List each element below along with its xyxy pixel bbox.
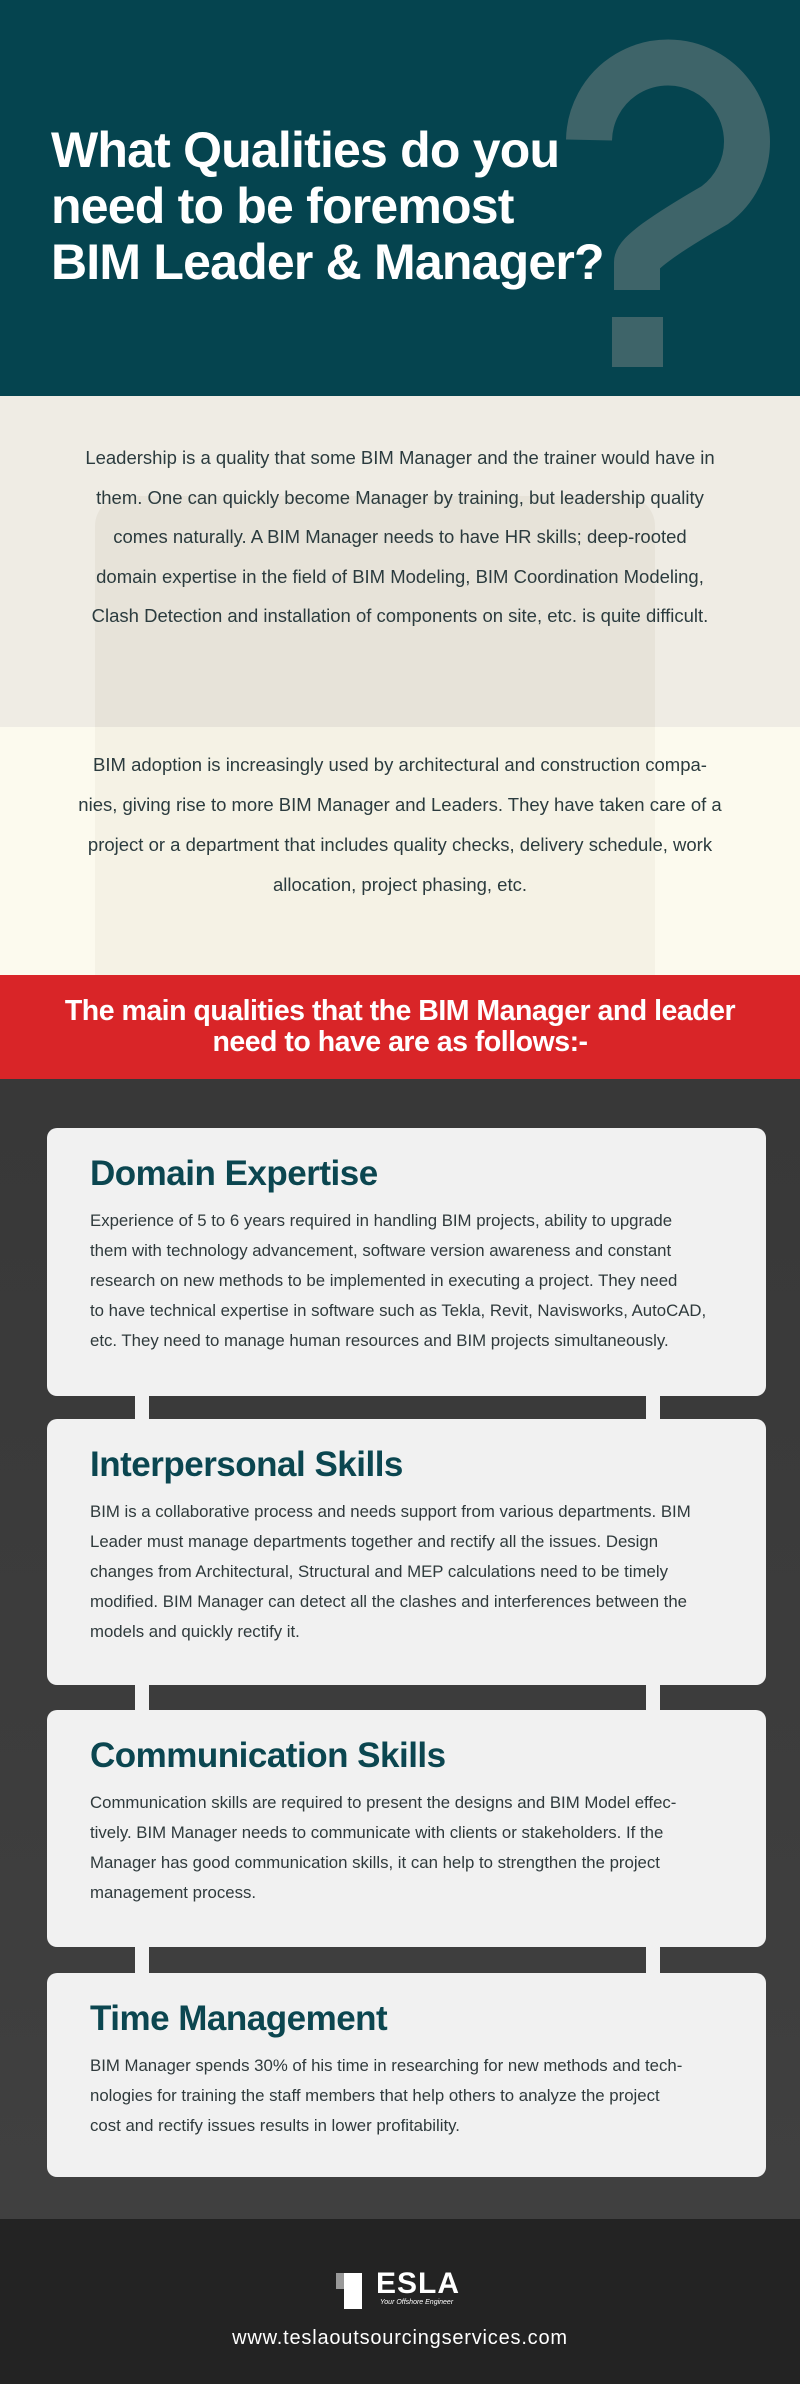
card: Interpersonal Skills: BIM is a collaborative process and needs support from various departments. BIM [90, 1502, 691, 1521]
card: Interpersonal Skills: models and quickly rectify it. [90, 1622, 300, 1641]
title: What Qualities do you [51, 122, 559, 178]
text block: BIM adoption: project or a department that includes quality checks, delivery schedule, work [88, 834, 712, 855]
banner heading [65, 995, 736, 1058]
text block: BIM adoption: nies, giving rise to more BIM Manager and Leaders. They have taken care of a [78, 794, 722, 815]
text block: leadership: comes naturally. A BIM Manager needs to have HR skills; deep-rooted [113, 526, 687, 547]
text block: leadership: Leadership is a quality that some BIM Manager and the trainer would have in [85, 447, 715, 468]
title: BIM Leader & Manager? [51, 234, 604, 290]
card: Domain Expertise: Domain Expertise [90, 1154, 378, 1193]
card: Time Management: Time Management [90, 1999, 387, 2038]
text block: leadership: Clash Detection and installation of components on site, etc. is quite difficult. [92, 605, 708, 626]
card: Domain Expertise: them with technology advancement, software version awareness and constant [90, 1241, 671, 1260]
card: Time Management [47, 1973, 766, 2177]
card: Communication Skills: management process. [90, 1883, 256, 1902]
dark section background [0, 1079, 800, 2219]
card: Domain Expertise: research on new methods to be implemented in executing a project. They need [90, 1271, 677, 1290]
card: Domain Expertise: etc. They need to manage human resources and BIM projects simultaneously. [90, 1331, 669, 1350]
banner heading: The main qualities that the BIM Manager and leader [65, 995, 735, 1027]
logo [336, 2267, 460, 2309]
red banner [0, 975, 800, 1079]
card: Time Management: BIM Manager spends 30% of his time in researching for new methods and tech- [90, 2056, 682, 2075]
card: Interpersonal Skills: changes from Architectural, Structural and MEP calculations need to be timely [90, 1562, 668, 1581]
card: Communication Skills: Manager has good communication skills, it can help to strengthen the project [90, 1853, 660, 1872]
card: Domain Expertise: Experience of 5 to 6 years required in handling BIM projects, ability to upgrade [90, 1211, 672, 1230]
title: need to be foremost [51, 178, 514, 234]
connectors [135, 1390, 149, 1980]
footer [0, 2219, 800, 2384]
text block: BIM adoption [78, 754, 722, 895]
banner heading: need to have are as follows:- [212, 1026, 588, 1058]
text block: BIM adoption: allocation, project phasing, etc. [273, 874, 527, 895]
card: Time Management: nologies for training the staff members that help others to analyze the project [90, 2086, 660, 2105]
text block: leadership: domain expertise in the field of BIM Modeling, BIM Coordination Modeling, [96, 566, 704, 586]
intro section 1 [0, 396, 800, 727]
card: Domain Expertise: to have technical expertise in software such as Tekla, Revit, Navisworks, AutoCAD, [90, 1301, 706, 1320]
header panel [0, 0, 800, 396]
text block: leadership [85, 447, 715, 626]
logo: ESLA [376, 2267, 460, 2300]
decorative shape [95, 496, 655, 727]
icon: question mark [566, 40, 770, 367]
card: Interpersonal Skills: modified. BIM Manager can detect all the clashes and interferences between the [90, 1592, 687, 1611]
card: Communication Skills: Communication Skills [90, 1736, 446, 1775]
logo: Your Offshore Engineer [380, 2299, 453, 2306]
title [51, 122, 604, 290]
card: Interpersonal Skills: Leader must manage departments together and rectify all the issues. Design [90, 1532, 658, 1551]
decorative shape [95, 727, 655, 975]
card: Interpersonal Skills [47, 1419, 766, 1685]
card: Communication Skills: Communication skills are required to present the designs and BIM Model effec- [90, 1793, 676, 1812]
card: Interpersonal Skills: Interpersonal Skills [90, 1445, 403, 1484]
text block: BIM adoption: BIM adoption is increasingly used by architectural and construction compa- [93, 754, 707, 775]
card: Communication Skills [47, 1710, 766, 1947]
card: Domain Expertise [47, 1128, 766, 1396]
intro section 2 [0, 727, 800, 975]
card: Communication Skills: tively. BIM Manager needs to communicate with clients or stakeholders. If the [90, 1823, 663, 1842]
text block: leadership: them. One can quickly become Manager by training, but leadership quality [96, 486, 704, 508]
website url: www.teslaoutsourcingservices.com [232, 2327, 568, 2349]
card: Time Management: cost and rectify issues results in lower profitability. [90, 2116, 460, 2135]
